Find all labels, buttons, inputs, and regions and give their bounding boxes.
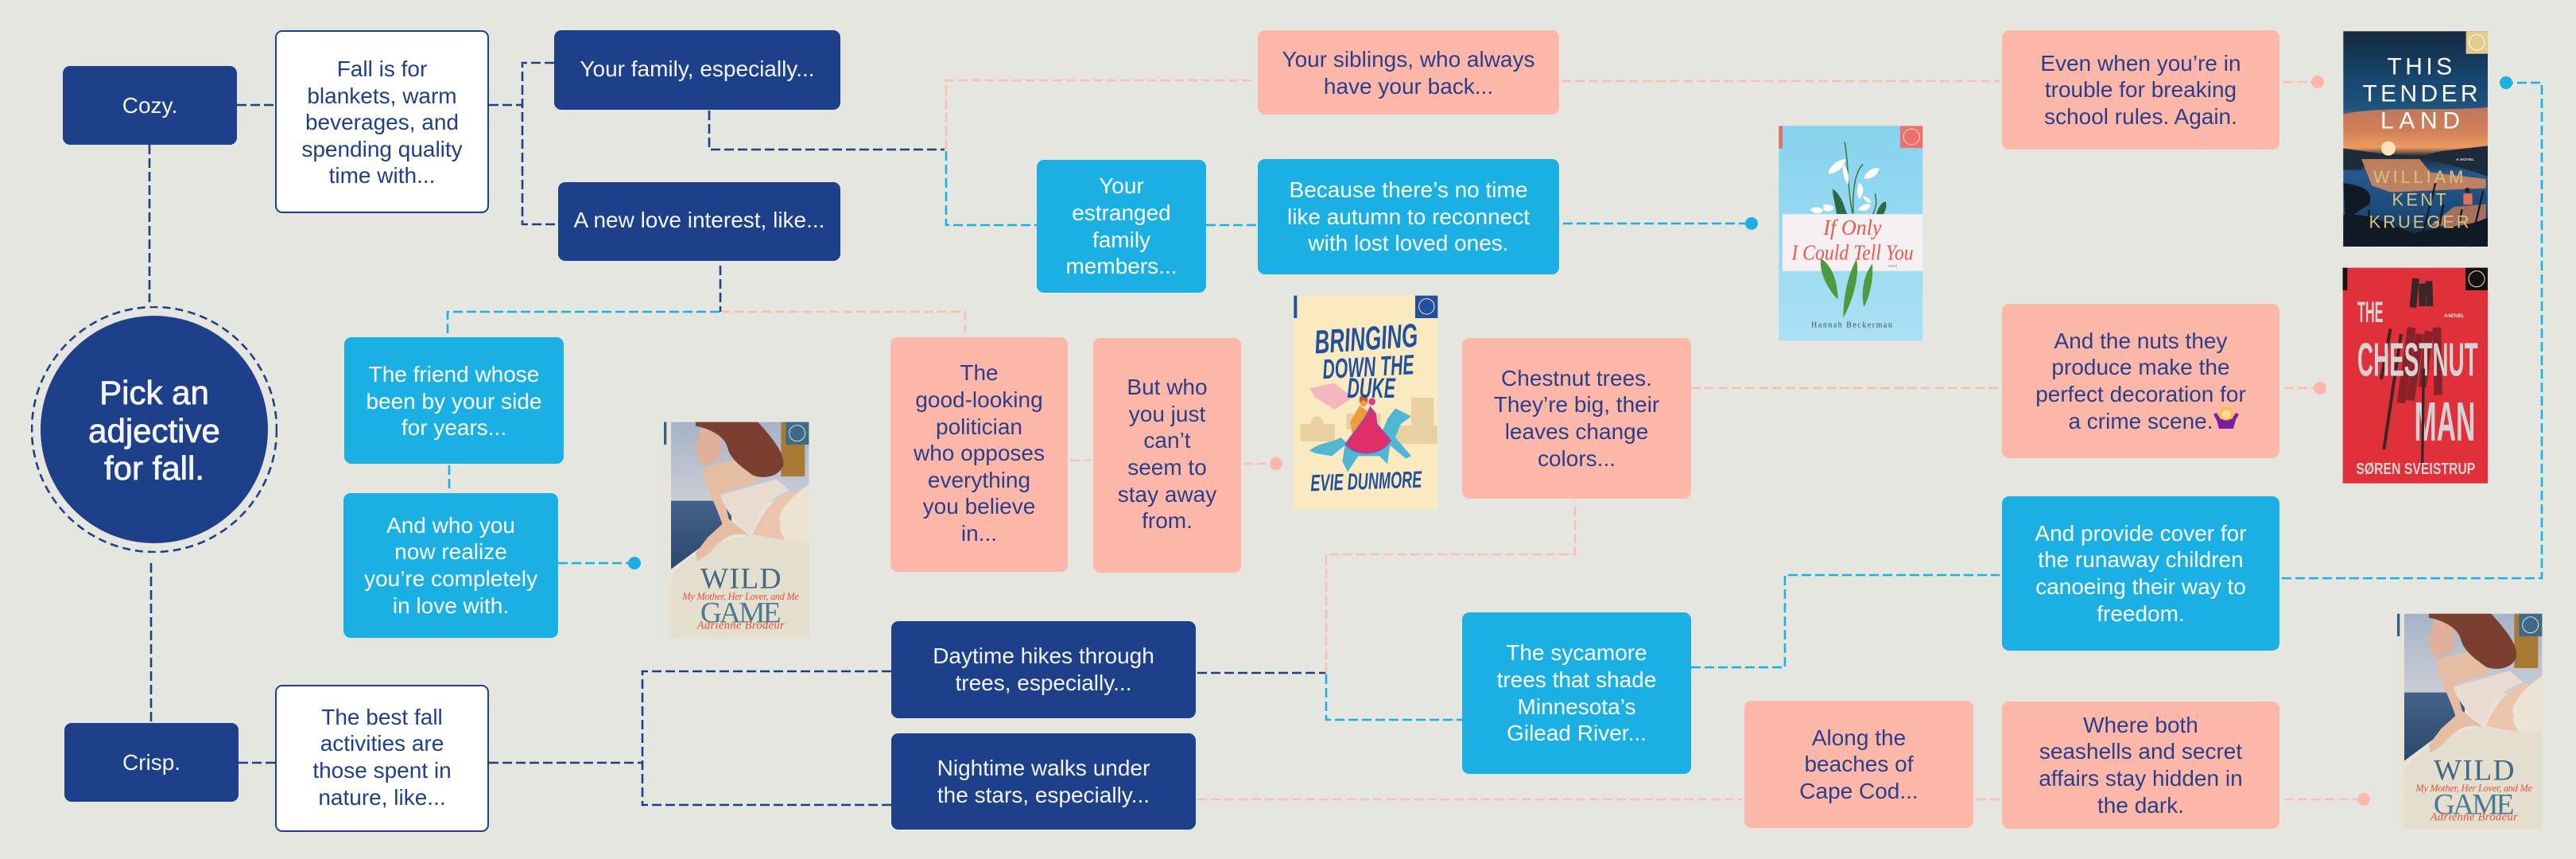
book cover: Bringing Down the Duke: DOWN THE [1321, 349, 1415, 385]
connector: daytime branch [1197, 502, 1575, 720]
book cover: The Chestnut Man: THE [2357, 295, 2384, 328]
box: friend: for years... [402, 415, 506, 440]
connector: reconnect to book dot [1563, 217, 1758, 230]
connector: sycamore to cover [1691, 575, 2000, 667]
box: estranged family: estranged [1072, 200, 1171, 225]
box: new love interest: A new love interest, like... [574, 208, 824, 232]
box: good-looking politician: politician [936, 414, 1022, 439]
connector: crisp to nature text [239, 762, 275, 764]
connector: chestnut trees to nuts to dot [1691, 382, 2326, 395]
box: nuts: produce make the [2051, 355, 2230, 379]
box: sycamore [1462, 612, 1691, 774]
box: even when: Even when you’re in [2040, 51, 2241, 76]
box: friend: The friend whose [369, 362, 539, 387]
box: fall is for: spending quality [301, 137, 463, 161]
start circle: pick an adjective: adjective [88, 412, 220, 449]
book cover: Wild Game (right): My Mother, Her Lover, and Me [2415, 783, 2533, 794]
book cover: Bringing Down the Duke [1294, 296, 1437, 510]
book cover: This Tender Land: KENT [2392, 189, 2446, 209]
book cover: Bringing Down the Duke: EVIE DUNMORE [1310, 467, 1423, 496]
box: fall is for: Fall is for [337, 56, 427, 81]
start circle: pick an adjective: Pick an [99, 374, 209, 411]
box: best fall activities: activities are [320, 731, 444, 756]
box: estranged family [1037, 160, 1206, 293]
book cover: The Chestnut Man: MAN [2415, 391, 2475, 453]
box: estranged family: Your [1099, 173, 1144, 198]
box: chestnut trees: Chestnut trees. [1501, 366, 1652, 391]
box: but who: seem to [1127, 455, 1207, 480]
box: along the beaches: Cape Cod... [1799, 779, 1918, 803]
box: along the beaches: Along the [1812, 725, 1906, 750]
book cover: The Chestnut Man: SØREN SVEISTRUP [2356, 461, 2475, 478]
box: new love interest [558, 182, 840, 261]
box: Cozy [63, 66, 237, 145]
box: good-looking politician: good-looking [915, 387, 1043, 412]
connector: siblings to school rules to dot [1562, 76, 2324, 88]
box: nighttime walks: the stars, especially... [937, 783, 1150, 807]
box: along the beaches [1744, 701, 1973, 828]
book cover: If Only I Could Tell You: Hannah Beckerman [1811, 321, 1892, 330]
book cover: Wild Game (right) [2397, 614, 2542, 830]
box: fall is for: beverages, and [305, 110, 459, 134]
book cover: Wild Game (left): WILD [700, 563, 781, 596]
box: estranged family: members... [1065, 254, 1177, 278]
box: and who you: And who you [386, 513, 515, 538]
box: Crisp: Crisp. [122, 750, 180, 775]
box: seashells: seashells and secret [2039, 739, 2242, 764]
book cover: Bringing Down the Duke: DUKE [1347, 373, 1396, 404]
box: chestnut trees [1462, 338, 1691, 499]
box: friend: been by your side [366, 389, 542, 414]
box: even when: school rules. Again. [2044, 104, 2237, 129]
box: nighttime walks [891, 733, 1196, 830]
box: best fall activities [275, 685, 489, 832]
connector: family branch [709, 80, 1254, 225]
book cover: Wild Game (left): GAME [700, 597, 781, 629]
box: daytime hikes: Daytime hikes through [933, 643, 1154, 668]
box: good-looking politician: everything [928, 468, 1030, 492]
connector: estranged family to reconnect [1206, 224, 1258, 226]
box: daytime hikes [891, 621, 1196, 718]
box: siblings: Your siblings, who always [1282, 47, 1535, 72]
box: fall is for: time with... [329, 163, 435, 188]
box: nuts: And the nuts they [2054, 328, 2227, 353]
box: good-looking politician: The [960, 360, 999, 385]
connector: cozy to circle [149, 145, 150, 302]
book cover: This Tender Land: THIS [2387, 53, 2452, 80]
connector: love interest branch [448, 266, 965, 337]
book cover: If Only I Could Tell You: a novel [1887, 263, 1898, 267]
box: fall is for: blankets, warm [307, 84, 457, 108]
box: provide cover: canoeing their way to [2035, 574, 2246, 599]
book cover: Wild Game (left): My Mother, Her Lover, and Me [681, 591, 800, 602]
book cover: Wild Game (left) [664, 422, 809, 638]
book cover: This Tender Land: TENDER [2362, 80, 2477, 107]
start circle: pick an adjective: for fall. [104, 449, 204, 487]
box: but who: can’t [1143, 428, 1191, 453]
box: even when [2002, 30, 2279, 150]
book cover: Wild Game (left): Adrienne Brodeur [696, 620, 785, 632]
book cover: Wild Game (right): WILD [2434, 755, 2514, 787]
box: provide cover: freedom. [2097, 601, 2185, 626]
box: best fall activities: those spent in [312, 758, 452, 783]
box: Cozy: Cozy. [122, 93, 177, 118]
book cover: This Tender Land: A NOVEL [2456, 157, 2474, 162]
book cover: The Chestnut Man [2343, 268, 2488, 484]
connector: cover to tender land dot [2282, 76, 2542, 578]
box: but who [1093, 338, 1241, 573]
box: nuts: a crime scene. [2068, 409, 2213, 433]
box: but who: you just [1129, 402, 1205, 426]
box: but who: But who [1127, 375, 1208, 399]
box: best fall activities: The best fall [321, 705, 443, 729]
box: daytime hikes: trees, especially... [955, 670, 1132, 695]
box: chestnut trees: colors... [1538, 446, 1616, 471]
box: seashells: Where both [2083, 713, 2198, 737]
box: because: Because there’s no time [1290, 177, 1527, 202]
icon: shrugging woman emoji [2213, 407, 2239, 429]
box: seashells: affairs stay hidden in [2039, 766, 2243, 791]
book cover: This Tender Land: LAND [2380, 108, 2460, 134]
connector: nighttime to cape cod [1197, 799, 1743, 800]
connector: fall text to family and love interest [489, 63, 558, 224]
box: sycamore: trees that shade [1497, 667, 1656, 692]
box: and who you: you’re completely [364, 566, 537, 591]
box: chestnut trees: They’re big, their [1494, 392, 1659, 417]
connector: friend to love [448, 465, 450, 492]
box: chestnut trees: leaves change [1505, 419, 1648, 444]
box: seashells [2002, 702, 2279, 829]
book cover: Bringing Down the Duke: BRINGING [1313, 317, 1419, 360]
box: but who: from. [1142, 508, 1193, 533]
connector: cape cod to seashells to dot [1977, 793, 2370, 806]
connector: nature text to daytime and nighttime [489, 671, 891, 805]
connector: love to wild game dot [558, 557, 641, 569]
book cover: This Tender Land [2343, 31, 2488, 247]
box: nuts: perfect decoration for [2035, 382, 2246, 406]
box: good-looking politician [890, 337, 1068, 572]
box: your family [554, 30, 840, 110]
box: sycamore: Gilead River... [1507, 721, 1647, 745]
box: and who you: now realize [394, 539, 507, 564]
box: provide cover [2002, 496, 2279, 651]
box: because: like autumn to reconnect [1287, 204, 1530, 229]
box: good-looking politician: you believe [923, 494, 1035, 519]
book cover: Wild Game (right): Adrienne Brodeur [2430, 811, 2518, 824]
box: seashells: the dark. [2097, 793, 2184, 818]
box: nuts [2002, 304, 2279, 458]
connector: cozy to fall text [237, 104, 275, 106]
box: because [1258, 159, 1559, 274]
book cover: This Tender Land: KRUEGER [2369, 212, 2469, 232]
box: even when: trouble for breaking [2045, 77, 2237, 102]
box: your family: Your family, especially... [580, 56, 815, 81]
box: good-looking politician: in... [961, 521, 997, 546]
box: fall is for [275, 30, 489, 213]
box: good-looking politician: who opposes [914, 441, 1045, 465]
box: provide cover: And provide cover for [2035, 521, 2247, 546]
book cover: If Only I Could Tell You: I Could Tell You [1790, 241, 1914, 265]
box: nighttime walks: Nightime walks under [937, 756, 1150, 780]
book cover: If Only I Could Tell You [1779, 126, 1922, 340]
box: provide cover: the runaway children [2038, 547, 2244, 572]
box: but who: stay away [1118, 482, 1216, 507]
book cover: This Tender Land: WILLIAM [2373, 167, 2463, 187]
box: best fall activities: nature, like... [318, 785, 446, 810]
book cover: If Only I Could Tell You: If Only [1822, 216, 1882, 239]
box: siblings [1258, 30, 1559, 115]
connector: politician to stay away to dot [1070, 457, 1282, 470]
connector: circle to crisp [150, 563, 152, 722]
box: sycamore: Minnesota’s [1518, 694, 1635, 719]
box: sycamore: The sycamore [1506, 640, 1647, 665]
box: friend [344, 337, 564, 464]
box: and who you [343, 493, 558, 638]
book cover: The Chestnut Man: A NOVEL [2444, 313, 2465, 319]
box: siblings: have your back... [1324, 74, 1493, 99]
box: Crisp [64, 723, 239, 802]
book cover: Wild Game (right): GAME [2434, 788, 2514, 821]
start circle: pick an adjective [31, 306, 277, 553]
box: and who you: in love with. [393, 593, 509, 618]
box: estranged family: family [1092, 227, 1150, 251]
box: along the beaches: beaches of [1804, 752, 1913, 776]
box: because: with lost loved ones. [1308, 231, 1509, 255]
